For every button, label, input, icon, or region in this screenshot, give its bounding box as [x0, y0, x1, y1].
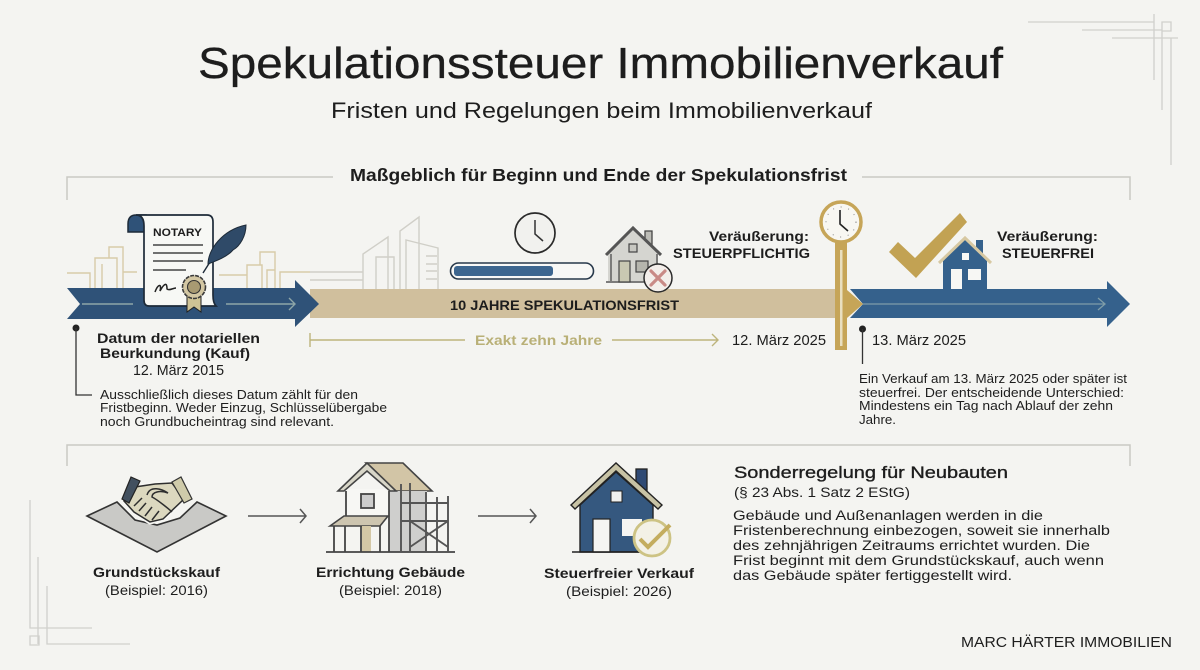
- text block: new build rule: des zehnjährigen Zeitraums errichtet wurden. Die: [733, 538, 1090, 553]
- text block: new build rule: [733, 463, 1110, 583]
- text block: new build rule: Fristenberechnung einbezogen, soweit sie innerhalb: [733, 523, 1110, 538]
- icon: handshake on plot: [87, 477, 226, 552]
- label: taxable sale: [673, 228, 810, 261]
- tan bar: ten year period: [310, 289, 840, 318]
- text: purchase date: [97, 330, 260, 379]
- progress bar: [450, 263, 594, 279]
- step label: construction: [316, 564, 465, 598]
- text: end date: 12. März 2025: [732, 332, 826, 349]
- text block: new build rule: Sonderregelung für Neubauten: [734, 463, 1008, 482]
- icon: gold clock key: [821, 202, 861, 350]
- text: purchase note: Fristbeginn. Weder Einzug, Schlüsselübergabe: [100, 401, 387, 415]
- label: tax free sale: [997, 228, 1098, 261]
- text: tax free date: 13. März 2025: [872, 332, 966, 349]
- text block: new build rule: Gebäude und Außenanlagen werden in die: [733, 508, 1043, 523]
- text: purchase note: Ausschließlich dieses Datum zählt für den: [100, 388, 358, 402]
- brand name: MARC HÄRTER IMMOBILIEN: [961, 634, 1172, 651]
- text: purchase date: Beurkundung (Kauf): [100, 345, 250, 361]
- step label: tax free sale: Steuerfreier Verkauf: [544, 565, 694, 581]
- text: tax free note: Jahre.: [859, 413, 896, 427]
- end marker: [859, 326, 866, 364]
- blue arrow: start: [67, 280, 319, 327]
- icon: red cross: [644, 264, 672, 292]
- step label: plot purchase: Grundstückskauf: [93, 564, 220, 580]
- text: tax free note: [859, 372, 1128, 427]
- step label: construction: Errichtung Gebäude: [316, 564, 465, 580]
- step label: tax free sale: [544, 565, 694, 599]
- start marker: [72, 324, 92, 395]
- text: purchase note: noch Grundbucheintrag sind relevant.: [100, 415, 334, 429]
- icon: notary document: [128, 215, 246, 312]
- step label: plot purchase: [93, 564, 220, 598]
- text: purchase note: [100, 388, 387, 429]
- step label: tax free sale: (Beispiel: 2026): [566, 584, 672, 599]
- icon: house under construction: [326, 463, 455, 552]
- bar label: 10 JAHRE SPEKULATIONSFRIST: [450, 297, 679, 313]
- text: tax free note: steuerfrei. Der entscheidende Unterschied:: [859, 386, 1124, 400]
- lower section bracket: [67, 445, 1130, 466]
- title: Spekulationssteuer Immobilienverkauf: [198, 39, 1004, 88]
- icon: gold check mark: [889, 213, 967, 278]
- label: taxable sale: STEUERPFLICHTIG: [673, 245, 810, 261]
- text block: new build rule: das Gebäude später fertiggestellt wird.: [733, 568, 1012, 583]
- subtitle: Fristen und Regelungen beim Immobilienverkauf: [331, 98, 873, 123]
- period range line: [310, 332, 718, 348]
- step label: plot purchase: (Beispiel: 2016): [105, 583, 208, 598]
- text: tax free note: Mindestens ein Tag nach Ablauf der zehn: [859, 399, 1113, 413]
- icon: taxable house: [606, 228, 672, 292]
- skyline left: [67, 247, 310, 288]
- icon: check badge: [634, 520, 670, 556]
- step label: construction: (Beispiel: 2018): [339, 583, 442, 598]
- icon: seal: [182, 276, 206, 312]
- icon: finished house with check: [571, 463, 670, 556]
- text: purchase date: Datum der notariellen: [97, 330, 260, 346]
- icon: quill: [203, 225, 246, 273]
- label: tax free sale: Veräußerung:: [997, 228, 1098, 244]
- blue arrow: tax free: [850, 281, 1130, 327]
- label: taxable sale: Veräußerung:: [709, 228, 809, 244]
- icon: notary document: NOTARY: [153, 227, 203, 239]
- label: tax free sale: STEUERFREI: [1002, 245, 1094, 261]
- text block: new build rule: Frist beginnt mit dem Grundstückskauf, auch wenn: [733, 553, 1104, 568]
- text: tax free note: Ein Verkauf am 13. März 2025 oder später ist: [859, 372, 1128, 386]
- arrow: [478, 509, 536, 523]
- top section bracket: [67, 177, 1130, 200]
- text: exact ten years: Exakt zehn Jahre: [475, 332, 602, 348]
- skyline right: [310, 217, 438, 289]
- text: purchase date: 12. März 2015: [133, 362, 224, 379]
- gold marker arrow tip: [847, 290, 863, 318]
- icon: blue house: [939, 238, 991, 289]
- arrow: [248, 509, 306, 523]
- icon: clock: [515, 213, 555, 253]
- text block: new build rule: (§ 23 Abs. 1 Satz 2 EStG): [734, 485, 910, 500]
- top section heading: Maßgeblich für Beginn und Ende der Spekulationsfrist: [350, 165, 847, 185]
